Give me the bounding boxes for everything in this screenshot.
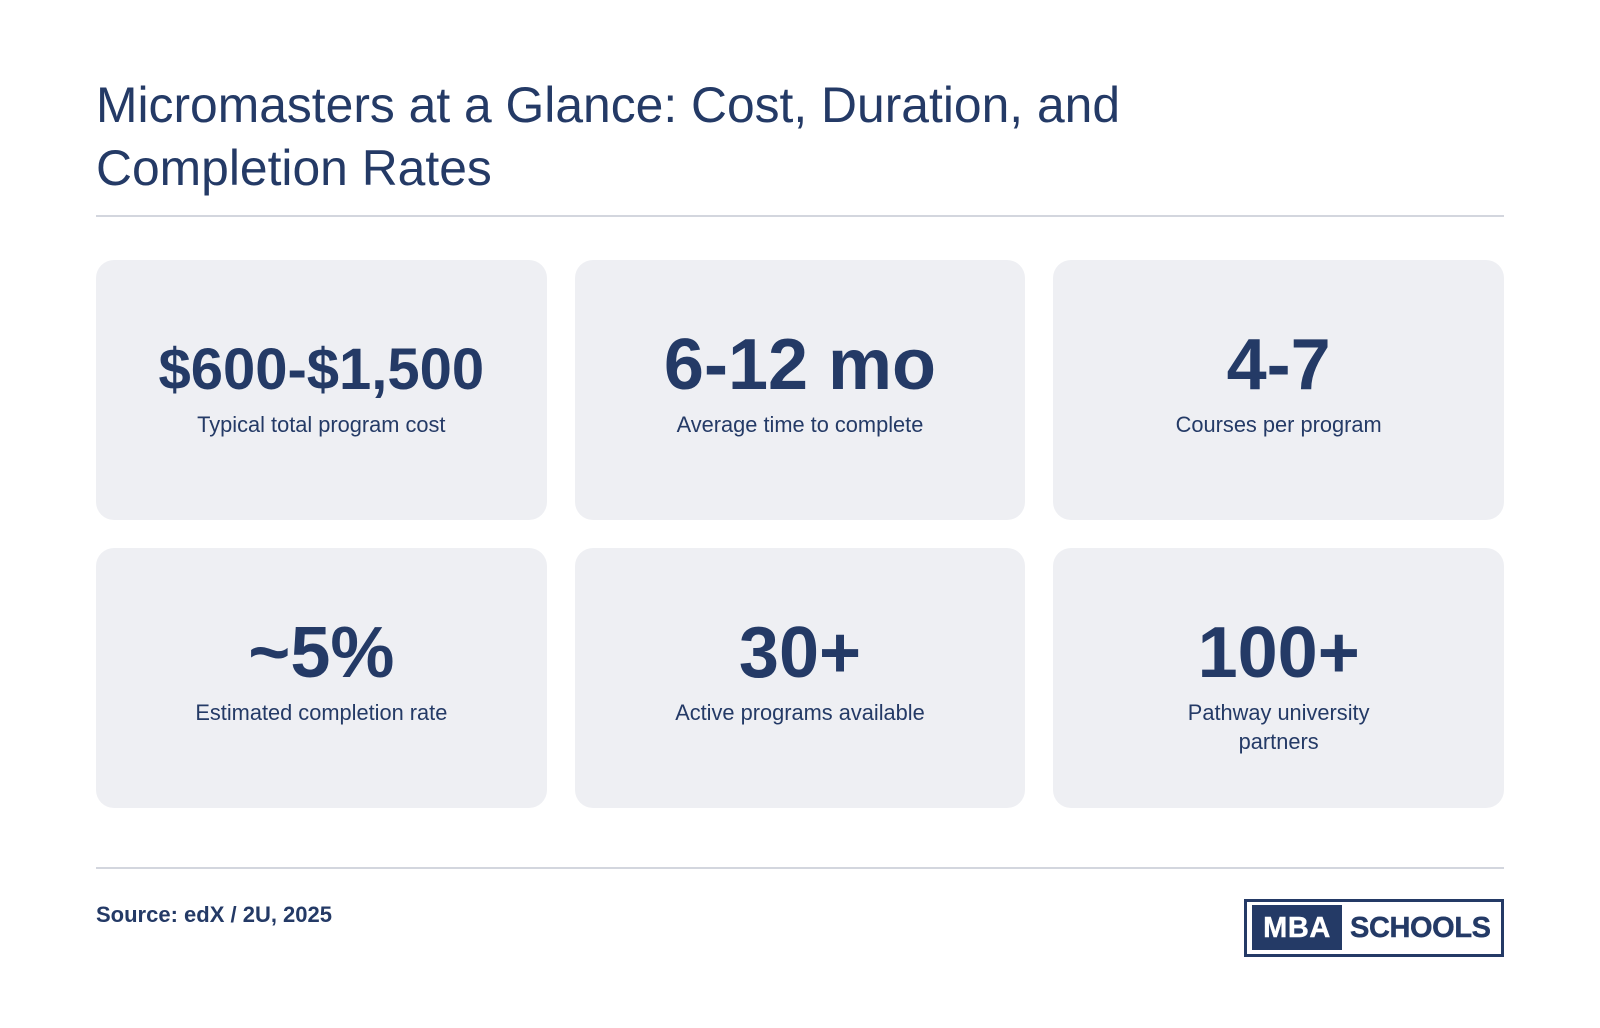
label: duration: Average time to complete [677,412,923,437]
title: Micromasters at a Glance: Cost, Duration, and [96,77,1120,133]
panel: university partners [1053,548,1504,808]
stat: programs value: 30+ [739,613,861,693]
stat: courses value: 4-7 [1227,325,1331,405]
stat: partners value: 100+ [1198,613,1360,693]
label: completion: Estimated completion rate [195,700,447,725]
panel: courses [1053,260,1504,520]
label: partners: partners [1239,729,1319,754]
label: partners [1188,700,1370,754]
panel: time to complete [575,260,1025,520]
panel: active programs [575,548,1025,808]
label: cost: Typical total program cost [197,412,446,437]
source note: Source: edX / 2U, 2025 [96,902,332,927]
panel: completion rate [96,548,547,808]
logo: MBA Schools: MBA [1263,912,1331,944]
title [96,77,1120,196]
logo: MBA Schools: SCHOOLS [1350,912,1491,944]
stat: duration value: 6-12 mo [664,325,936,405]
title: Completion Rates [96,140,492,196]
stat: completion value: ~5% [248,613,394,693]
label: programs: Active programs available [675,700,925,725]
stat: cost value: $600-$1,500 [158,337,484,402]
label: partners: Pathway university [1188,700,1370,725]
panel: program cost [96,260,547,520]
label: courses: Courses per program [1176,412,1382,437]
logo: MBA Schools [1244,899,1504,957]
